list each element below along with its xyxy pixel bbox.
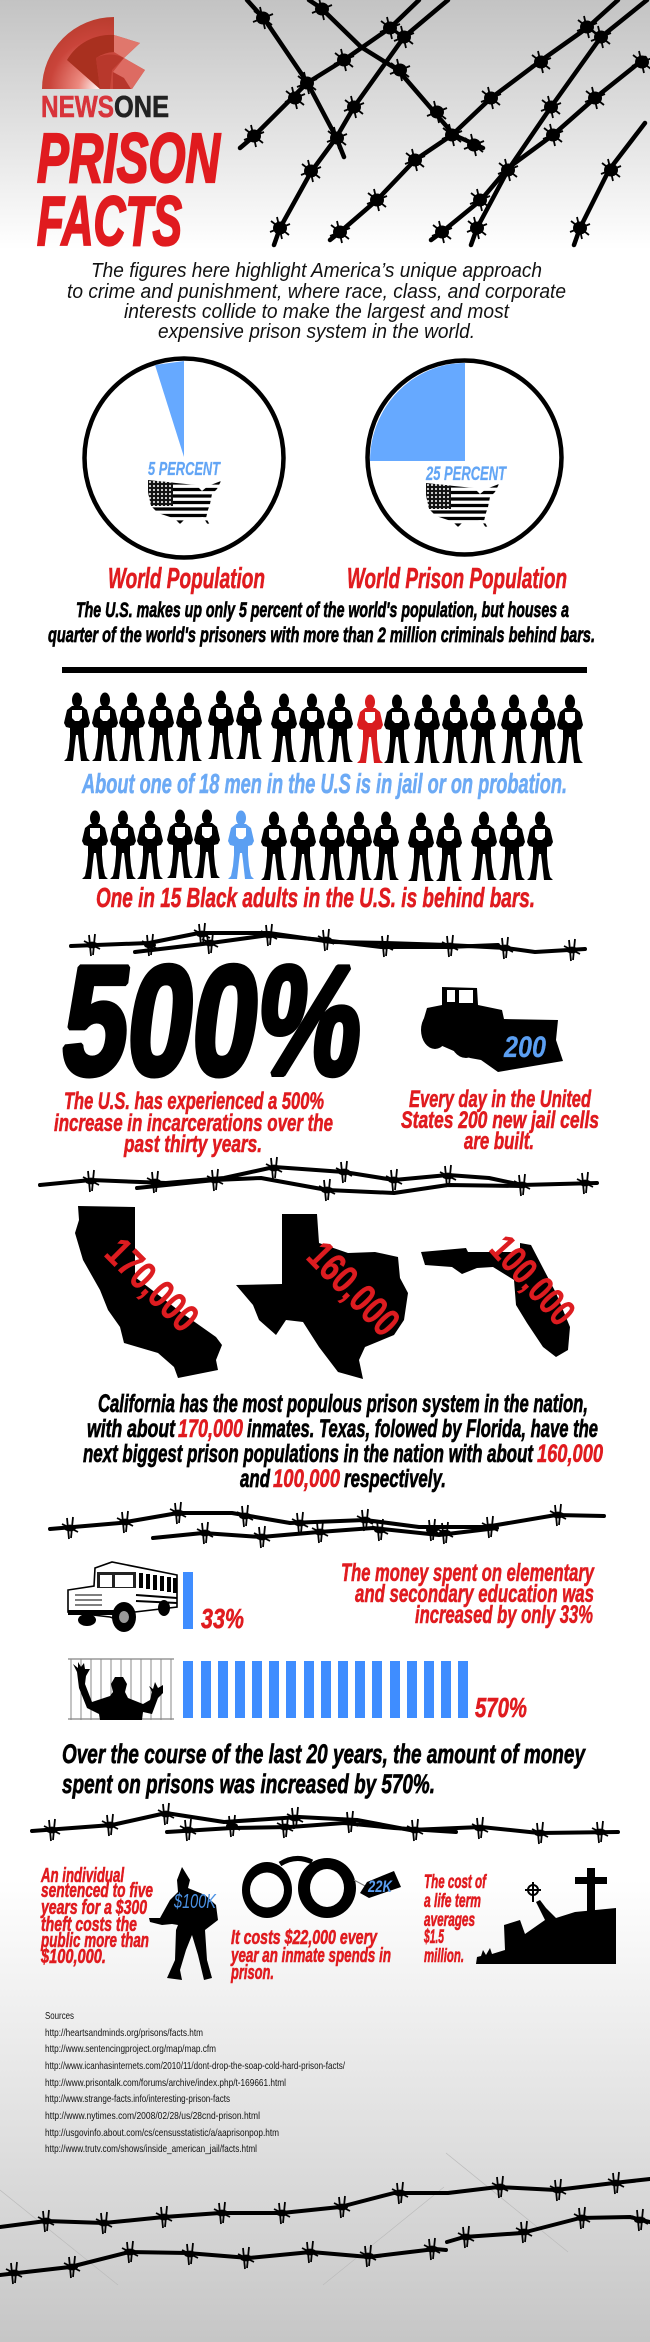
text: life term cost: averages — [424, 1910, 475, 1931]
text: $300 theft — [40, 1865, 153, 1968]
icon: school bus — [68, 1562, 177, 1632]
barbed wire divider 4 — [32, 1803, 618, 1844]
big stat 500%: 500% — [54, 934, 373, 1107]
sources list: http://www.nytimes.com/2008/02/28/us/28cnd-prison.html — [45, 2110, 260, 2122]
paragraph: state populations — [83, 1390, 603, 1493]
text: education spending — [341, 1559, 595, 1629]
map: California: 170,000 — [97, 1230, 207, 1341]
logo wordmark: NEWS — [41, 89, 114, 124]
pie chart: world prison population: 25 PERCENT — [425, 464, 507, 485]
text: 500% increase — [54, 1088, 333, 1158]
barbed wire header — [240, 0, 650, 245]
pie chart: world population: 5 PERCENT — [148, 459, 221, 479]
sources list: http://usgovinfo.about.com/cs/censusstatistic/a/aaprisonpop.htm — [45, 2127, 279, 2139]
pie chart: world prison population — [368, 360, 562, 554]
text: $300 theft: sentenced to five — [41, 1880, 153, 1902]
text: $300 theft: An individual — [40, 1865, 124, 1887]
text: 200 new jail cells: are built. — [464, 1128, 534, 1155]
icon: NewsOne logo fan — [42, 17, 145, 89]
paragraph: state populations: with about — [87, 1415, 176, 1443]
paragraph: state populations: 160,000 — [537, 1440, 603, 1468]
map: Texas — [236, 1214, 408, 1379]
text: $300 theft: public more than — [40, 1930, 149, 1952]
icon: prisoner behind bars — [68, 1659, 174, 1720]
map: Texas: 160,000 — [299, 1234, 408, 1345]
sources list: http://www.strange-facts.info/interesting-prison-facts — [45, 2093, 230, 2105]
barbed wire divider 3 — [50, 1502, 604, 1548]
paragraph: state populations: respectively. — [344, 1465, 446, 1493]
sources list: http://www.sentencingproject.org/map/map.cfm — [45, 2043, 216, 2055]
text: life term cost: The cost of — [424, 1872, 487, 1893]
paragraph: state populations: and — [240, 1465, 270, 1493]
pie labels: World Population — [108, 563, 265, 595]
text: 500% increase: increase in incarcerations over the — [54, 1110, 333, 1137]
sources list — [45, 2010, 345, 2155]
sources list: Sources — [45, 2010, 74, 2022]
text: life term cost: million. — [424, 1946, 464, 1967]
text: prison spending — [62, 1739, 586, 1799]
sources list: http://www.prisontalk.com/forums/archive/index.php/t-169661.html — [45, 2077, 286, 2089]
icon: robber with $100K — [149, 1867, 218, 1980]
intro text — [67, 260, 566, 343]
icon: robber with $100K: $100K — [173, 1891, 217, 1913]
text: $22,000 a year: It costs $22,000 every — [231, 1927, 378, 1949]
intro text: to crime and punishment, where race, class, and corporate — [67, 281, 566, 303]
text: prison spending: spent on prisons was increased by 570%. — [62, 1769, 435, 1799]
icon: bulldozer — [421, 987, 563, 1072]
pie labels — [108, 563, 567, 595]
text: life term cost: $1.5 — [423, 1927, 444, 1948]
icon: handcuffs with $22K tag: 22K — [367, 1877, 393, 1896]
icon: handcuffs with $22K tag — [242, 1858, 401, 1918]
pie chart: world population — [84, 358, 284, 558]
intro text: interests collide to make the largest and most — [124, 301, 510, 323]
icon: bulldozer: 200 — [503, 1031, 546, 1064]
paragraph: state populations: 170,000 — [178, 1415, 243, 1443]
icon: graveyard — [476, 1868, 616, 1964]
bar: 33 percent — [183, 1572, 244, 1634]
text: $22,000 a year: prison. — [230, 1962, 274, 1984]
text: $22,000 a year — [230, 1927, 391, 1984]
label: 570%: 570% — [475, 1692, 527, 1723]
title: FACTS — [37, 182, 182, 260]
paragraph: state populations: 100,000 — [273, 1465, 340, 1493]
figures row: 1 in 18 men — [64, 690, 583, 763]
bar: 33 percent: 33% — [201, 1603, 244, 1634]
text: $22,000 a year: year an inmate spends in — [230, 1945, 391, 1967]
intro text: The figures here highlight America’s unique approach — [91, 260, 542, 282]
sources list: http://heartsandminds.org/prisons/facts.htm — [45, 2027, 203, 2039]
title: PRISON — [37, 119, 221, 197]
text: $300 theft: years for a $300 — [40, 1897, 147, 1919]
logo wordmark: ONE — [114, 89, 169, 124]
text: 200 new jail cells — [401, 1086, 599, 1155]
text: 500% increase: The U.S. has experienced a 500% — [64, 1088, 324, 1115]
text: $300 theft: theft costs the — [41, 1914, 137, 1936]
text: life term cost: a life term — [424, 1891, 481, 1912]
sources list: http://www.trutv.com/shows/inside_american_jail/facts.html — [45, 2143, 257, 2155]
map: Florida: 100,000 — [481, 1228, 583, 1334]
text: $300 theft: $100,000. — [40, 1946, 106, 1968]
sources list: http://www.icanhasinternets.com/2010/11/dont-drop-the-soap-cold-hard-prison-facts/ — [45, 2060, 345, 2072]
bars: 570 percent — [183, 1661, 468, 1718]
text: 500% increase: past thirty years. — [123, 1131, 262, 1158]
barbed wire divider 2 — [40, 1157, 597, 1201]
barbed wire divider 1 — [71, 923, 585, 961]
map: California — [75, 1206, 222, 1378]
title — [37, 119, 221, 260]
text: life term cost — [423, 1872, 487, 1967]
figures row: 1 in 15 black adults — [82, 810, 553, 881]
barbed wire footer — [0, 2153, 650, 2285]
map: Florida — [421, 1228, 583, 1357]
divider bar — [62, 667, 587, 673]
intro text: expensive prison system in the world. — [158, 321, 475, 343]
population summary — [48, 598, 595, 647]
